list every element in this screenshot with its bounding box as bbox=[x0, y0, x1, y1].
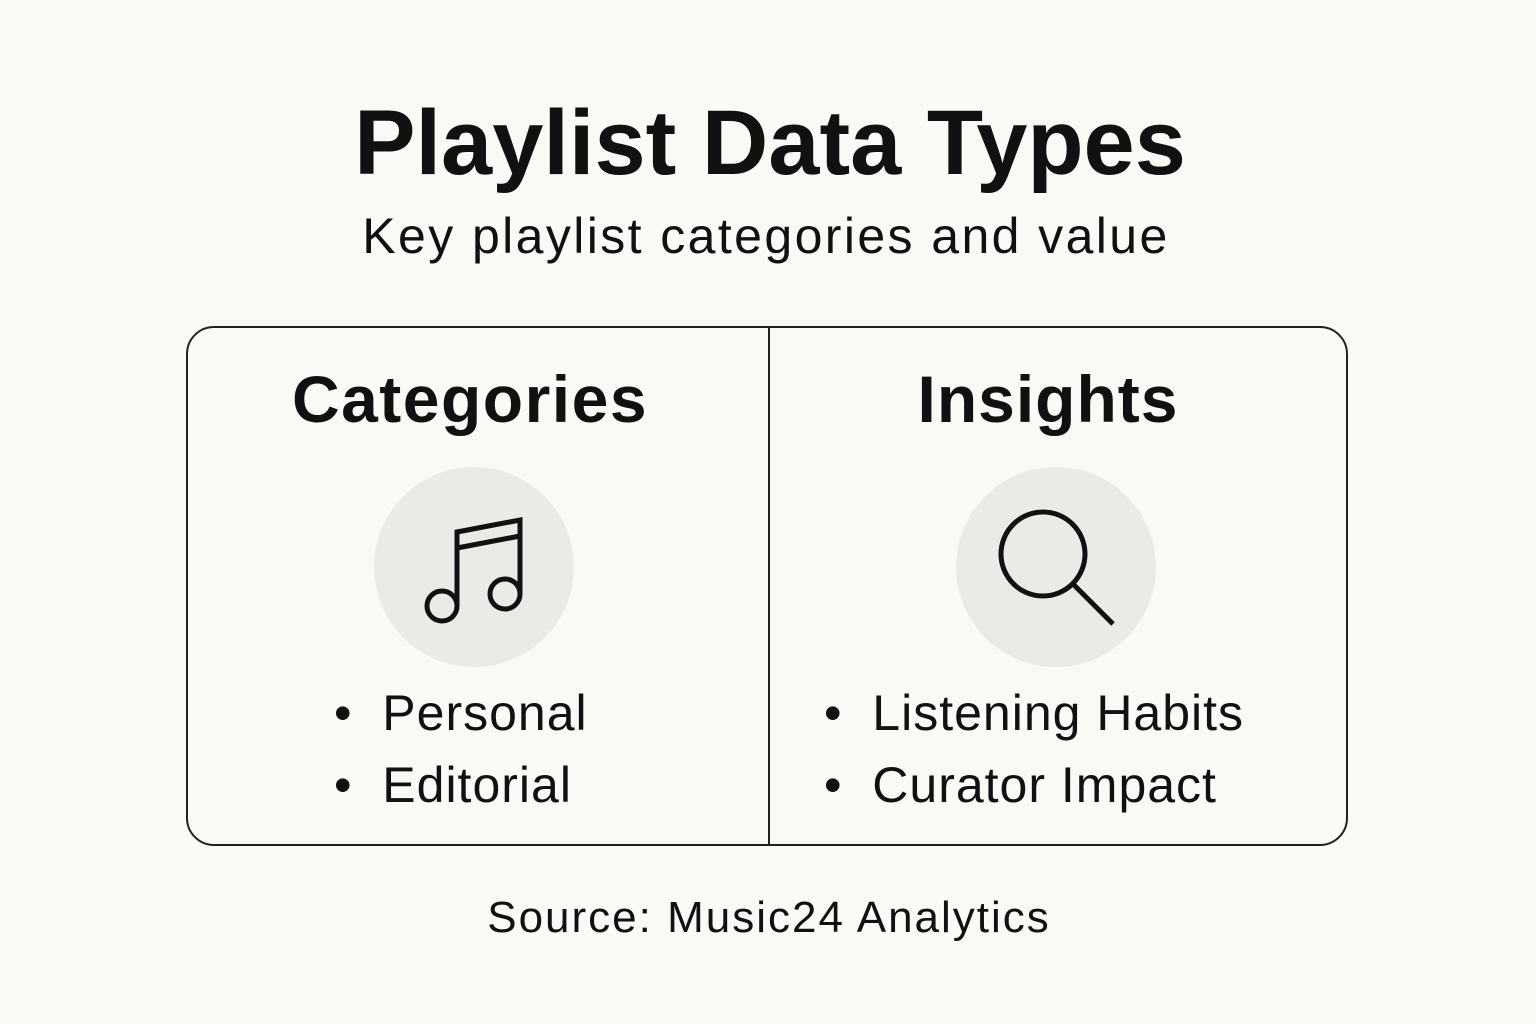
source: Source: Music24 Analytics bbox=[487, 893, 1051, 942]
list: insights: • Listening Habits bbox=[824, 685, 1244, 741]
list: categories bbox=[334, 685, 588, 813]
list: insights: • Curator Impact bbox=[824, 757, 1217, 813]
heading: categories: Categories bbox=[292, 362, 648, 436]
icon: magnifier bbox=[956, 467, 1156, 667]
panel: categories bbox=[188, 328, 770, 844]
panel box bbox=[186, 326, 1348, 846]
icon: music note bbox=[374, 467, 574, 667]
heading: insights: Insights bbox=[917, 362, 1178, 436]
title: Playlist Data Types bbox=[354, 92, 1186, 194]
panel: insights bbox=[824, 362, 1244, 813]
list: insights bbox=[824, 685, 1244, 813]
list: categories: • Personal bbox=[334, 685, 588, 741]
list: categories: • Editorial bbox=[334, 757, 572, 813]
subtitle: Key playlist categories and value bbox=[362, 208, 1170, 264]
